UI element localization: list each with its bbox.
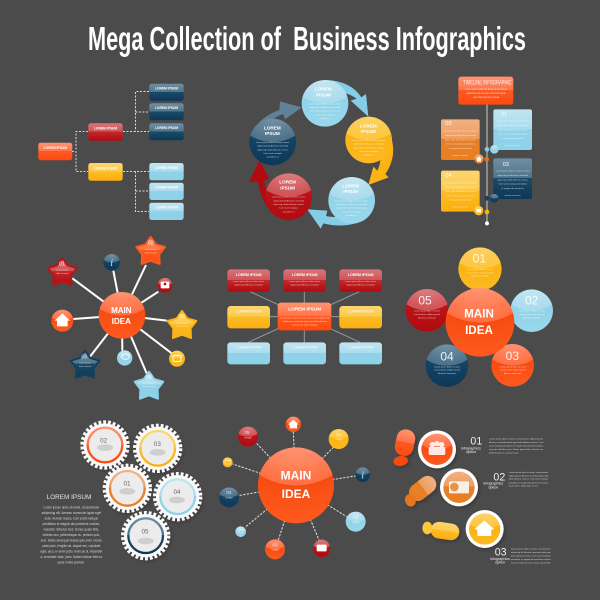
- step 3 text: penatibus et magnis dis parturient montes: [511, 558, 551, 561]
- circle 05: [406, 289, 448, 332]
- timeline card 03: Cum sociis natoque penatibus: [498, 183, 527, 186]
- step 3 text: nascetur ridiculus mus. Donec quam felis.: [511, 561, 551, 564]
- root box: LOREM IPSUM: [44, 146, 67, 150]
- red row: Lorem ipsum dolor sit amet consec: [345, 280, 376, 283]
- step 1 text: nascetur ridiculus mus. Donec quam felis, ultricies nec: [489, 448, 544, 451]
- circle: red: Lorem ipsum dolor sit amet consec: [272, 196, 306, 199]
- step 2 label: infographics: [483, 482, 503, 486]
- timeline card 04: adipiscing elit Aenean commodo: [445, 186, 477, 189]
- circle 03: 03: [506, 349, 519, 363]
- center box: LOREM IPSUM: [288, 307, 321, 312]
- circle: dark: LOREM: [264, 125, 281, 130]
- step 3 text: adipiscing elit. Aenean commodo ligula eget: [511, 551, 551, 554]
- node 02: Design: [352, 522, 360, 524]
- circle 04: [426, 344, 468, 387]
- circle: yellow: penatibus et: [363, 154, 375, 157]
- panel: star diagram: [48, 237, 196, 399]
- arrow: bottom to red: [307, 209, 368, 229]
- circle 04: consectetuer adipiscing elit: [434, 369, 460, 372]
- node 03: 03: [272, 542, 278, 547]
- gears body text: adipiscing elit. Aenean commodo ligula eget: [42, 510, 102, 515]
- circle: red: Cum sociis natoque: [279, 207, 299, 210]
- step 2 label: [483, 471, 505, 489]
- red row: Lorem ipsum dolor sit amet consec: [233, 280, 264, 283]
- icon: info: i: [110, 258, 113, 269]
- root box: [38, 143, 72, 160]
- step 1 label: infographics: [461, 446, 481, 450]
- timeline card 04: Cum sociis natoque penatibus: [446, 194, 475, 197]
- circle 01: Aenean commodo: [471, 275, 490, 278]
- panel: cycle diagram: [249, 80, 393, 229]
- yellow row: LOREM IPSUM: [236, 310, 262, 314]
- circle: top: Lorem ipsum dolor sit amet consec: [308, 102, 343, 105]
- circle 03: Lorem ipsum dolor sit amet: [500, 365, 526, 368]
- red row: LOREM IPSUM: [292, 273, 318, 277]
- gear 01: [105, 466, 150, 511]
- circle 02: [510, 289, 553, 332]
- dark boxes: LOREM IPSUM: [155, 106, 178, 110]
- arrow: yellow to bottom: [368, 129, 393, 185]
- star 01: [48, 258, 77, 285]
- light row: LOREM IPSUM: [292, 345, 318, 349]
- circle 05: 05: [418, 294, 432, 308]
- step 1 text: [489, 438, 544, 454]
- red row: LOREM IPSUM: [348, 273, 374, 277]
- star 03: dolor sit amet: [176, 325, 188, 328]
- timeline card 04: ligula eget dolor Aenean massa: [445, 190, 476, 193]
- circle: top: ligula eget dolor Aenean massa: [310, 110, 341, 113]
- node: speech: [235, 526, 246, 537]
- circle: top: adipiscing elit Aenean commodo: [310, 106, 341, 109]
- circle: bottom: Cum sociis natoque: [342, 210, 362, 213]
- gears body text: eget, arcu. In enim justo, rhoncus ut, imperdiet: [40, 548, 103, 553]
- dark boxes: LOREM IPSUM: [155, 126, 178, 130]
- circle: yellow: Lorem ipsum dolor sit amet consec: [352, 139, 386, 142]
- step 3 label: infographics: [490, 557, 510, 561]
- footprint 1: [393, 428, 417, 467]
- star 03: 03: [179, 314, 185, 320]
- star 04: [135, 372, 163, 399]
- star 03: Lorem ipsum: [176, 321, 188, 324]
- panel: gears: [40, 422, 200, 564]
- circle 03: [491, 344, 534, 387]
- yellow row: [227, 306, 382, 328]
- node: envelope: [223, 457, 233, 467]
- timeline card 02: Cum sociis natoque penatibus: [446, 143, 475, 146]
- node 01: [329, 429, 349, 449]
- timeline card 02: 02: [445, 121, 452, 127]
- icon: envelope: [169, 351, 185, 367]
- main idea circle: IDEA: [465, 324, 494, 337]
- timeline card 04: 04: [445, 173, 452, 179]
- circle: dark: penatibus et: [267, 156, 279, 159]
- step 2 text: nascetur ridiculus mus.: [509, 485, 539, 488]
- circle 04: Lorem ipsum dolor sit amet: [434, 365, 460, 368]
- node 05: Design: [244, 437, 252, 439]
- circle: bottom: Lorem ipsum dolor sit amet consec: [335, 199, 369, 202]
- node 04: Design: [225, 498, 233, 500]
- circle: yellow: ligula eget dolor Aenean massa: [354, 146, 385, 149]
- gear 02: 02: [100, 437, 108, 444]
- spokes: [72, 265, 172, 373]
- timeline card 01: [493, 109, 532, 150]
- red row: adipiscing elit Aenean commodo: [290, 283, 320, 286]
- step 1 text: Aenean commodo ligula eget dolor. Aenean massa. Cum: [489, 441, 544, 444]
- gears body text: [40, 504, 103, 564]
- circle: red: IPSUM: [280, 185, 295, 190]
- step 2 text: penatibus et magnis dis parturient montes: [509, 481, 548, 484]
- light boxes: [149, 163, 184, 220]
- gears body text: ultricies nec, pellentesque eu, pretium quis,: [43, 532, 100, 537]
- light boxes: LOREM IPSUM: [155, 186, 178, 190]
- step 3 text: Lorem ipsum dolor sit amet, consectetuer: [511, 548, 551, 551]
- circle 01: 01: [473, 252, 486, 266]
- arrow: dark to top: [251, 101, 302, 137]
- panel: five circles: [406, 247, 553, 387]
- gears body text: a, venenatis vitae, justo. Nullam dictum felis eu: [40, 554, 102, 559]
- circle: red: [265, 173, 312, 220]
- timeline card 02: adipiscing elit Aenean commodo: [445, 134, 477, 137]
- circle: top: LOREM: [315, 87, 332, 92]
- timeline card 01: et magnis dis parturient: [501, 137, 524, 140]
- light boxes: LOREM IPSUM: [155, 206, 178, 210]
- timeline card 02: Lorem ipsum dolor sit amet consec: [444, 130, 478, 133]
- star 01: 01: [59, 261, 65, 267]
- circle: yellow: LOREM: [360, 123, 377, 128]
- step 1 text: pellentesque eu, pretium quis.: [489, 451, 519, 454]
- step 3 label: option: [495, 561, 505, 565]
- main idea hub: IDEA: [112, 317, 131, 326]
- circle 05: Aenean commodo: [418, 316, 437, 319]
- star 05: 05: [81, 354, 87, 360]
- gear 05: [123, 513, 168, 558]
- circle 02: Aenean commodo: [523, 316, 541, 319]
- circle: bottom: [328, 177, 375, 224]
- timeline card 04: montes nascetur: [452, 205, 469, 208]
- timeline card 01: ligula eget dolor Aenean massa: [498, 128, 529, 131]
- step 1 text: sociis natoque penatibus et magnis dis parturient montes: [489, 444, 543, 447]
- circle: top: penatibus et: [319, 117, 331, 120]
- step 2 text: [509, 471, 549, 488]
- icon: info: [103, 254, 120, 271]
- light boxes: LOREM IPSUM: [155, 166, 178, 170]
- node 04: 04: [226, 490, 232, 495]
- circle: dark: Lorem ipsum dolor sit amet consec: [256, 141, 290, 144]
- footprint 2: [403, 472, 440, 508]
- yellow row: LOREM IPSUM: [348, 310, 374, 314]
- star 02: Lorem ipsum: [145, 248, 157, 251]
- step 2 label: option: [488, 485, 498, 489]
- dashed spokes: [233, 432, 355, 541]
- timeline header: eget dolor Aenean massa: [473, 96, 500, 99]
- gear 05: 05: [141, 529, 149, 536]
- footprint 3: [422, 521, 460, 541]
- timeline card 04: et magnis dis parturient: [449, 199, 472, 202]
- timeline card 03: ligula eget dolor Aenean massa: [498, 178, 529, 181]
- timeline header: TIMELINE INFOGRAPHIC: [463, 80, 512, 86]
- red row: LOREM IPSUM: [236, 273, 262, 277]
- light row: LOREM IPSUM: [348, 345, 374, 349]
- yellow box: LOREM IPSUM: [94, 166, 117, 170]
- circle 01: [458, 247, 502, 291]
- red box: [88, 123, 123, 141]
- gears body text: penatibus et magnis dis parturient montes,: [43, 521, 100, 526]
- circle 01: consectetuer adipiscing elit: [467, 271, 493, 274]
- circle 05: consectetuer adipiscing elit: [414, 313, 440, 316]
- circle 03: consectetuer adipiscing elit: [500, 369, 526, 372]
- step 1 text: Lorem ipsum dolor sit amet, consectetuer adipiscing elit.: [489, 438, 544, 441]
- main idea hub: MAIN: [281, 469, 311, 483]
- node: info: [355, 467, 370, 482]
- circle: top: IPSUM: [316, 92, 331, 97]
- circle 05: Lorem ipsum dolor sit amet: [414, 310, 440, 313]
- circle: bottom: LOREM: [342, 183, 359, 188]
- icon: team: [158, 278, 172, 293]
- center box: elit Aenean commodo ligula eget dolor Aenean: [282, 320, 328, 323]
- circle 04: 04: [440, 349, 454, 363]
- circle: bottom: IPSUM: [343, 189, 358, 194]
- red row: adipiscing elit Aenean commodo: [346, 283, 376, 286]
- node: info: i: [361, 470, 364, 481]
- node 05: [238, 427, 258, 447]
- main idea hub: MAIN: [111, 306, 132, 315]
- step 3 label: [490, 547, 510, 565]
- star 02: 02: [148, 241, 154, 247]
- gear 03: [135, 426, 180, 471]
- star 05: dolor sit amet: [79, 365, 91, 368]
- timeline card 03: 03: [503, 162, 509, 168]
- star 03: [168, 311, 196, 338]
- timeline card 04: [441, 171, 480, 212]
- circle: red: ligula eget dolor Aenean massa: [274, 203, 305, 206]
- circle 03: Aenean commodo: [504, 372, 522, 375]
- center box: Lorem ipsum dolor sit amet consectetuer adipiscing: [280, 317, 330, 320]
- node: team: [313, 540, 330, 557]
- dark boxes: [149, 84, 184, 140]
- timeline card 03: montes nascetur: [505, 194, 521, 197]
- timeline header: Lorem ipsum dolor sit amet consectetuer: [465, 88, 507, 91]
- main idea circle: MAIN: [464, 308, 494, 321]
- circle: top: Cum sociis natoque: [316, 113, 335, 116]
- timeline card 03: et magnis dis parturient: [501, 187, 524, 190]
- gear 04: [155, 474, 200, 519]
- red row: [227, 269, 382, 292]
- timeline card 01: Lorem ipsum dolor sit amet consec: [496, 120, 530, 123]
- star 02: dolor sit amet: [145, 251, 157, 254]
- star 04: Lorem ipsum: [143, 382, 155, 385]
- timeline card 01: Cum sociis natoque penatibus: [498, 133, 527, 136]
- step 3 label: 03: [495, 547, 507, 559]
- node 04: [219, 487, 239, 507]
- timeline card 03: Lorem ipsum dolor sit amet consec: [496, 170, 530, 173]
- panel: timeline: [441, 77, 532, 225]
- circle: yellow: IPSUM: [361, 129, 376, 134]
- step 1 circle: [418, 430, 456, 468]
- node 02: 02: [353, 515, 359, 520]
- circle: red: adipiscing elit Aenean commodo: [273, 199, 305, 202]
- timeline nodes: [474, 145, 499, 225]
- circle: yellow: Cum sociis natoque: [359, 150, 379, 153]
- timeline card 02: et magnis dis parturient: [449, 147, 472, 150]
- circle: yellow: [345, 117, 392, 163]
- star 04: dolor sit amet: [143, 385, 155, 388]
- star 05: [71, 351, 99, 378]
- star 04: 04: [146, 374, 152, 380]
- step 2 text: Lorem ipsum dolor sit amet, consectetuer: [509, 471, 549, 474]
- timeline header: [458, 77, 513, 105]
- dark boxes: LOREM IPSUM: [155, 86, 178, 90]
- red box: LOREM IPSUM: [94, 126, 117, 130]
- circle 02: consectetuer adipiscing elit: [519, 313, 545, 316]
- light row: LOREM IPSUM: [236, 345, 262, 349]
- timeline card 02: ligula eget dolor Aenean massa: [445, 138, 476, 141]
- node 01: Design: [335, 439, 343, 441]
- node 03: Design: [271, 549, 279, 551]
- step 2 text: dolor. Aenean massa. Cum sociis natoque: [509, 478, 549, 481]
- circle: bottom: adipiscing elit Aenean commodo: [336, 203, 368, 206]
- gear 03: 03: [154, 441, 161, 448]
- icon: speech: [117, 350, 132, 366]
- node 03: [265, 539, 285, 559]
- circle: dark: Cum sociis natoque: [263, 152, 283, 155]
- timeline card 04: Lorem ipsum dolor sit amet consec: [444, 181, 478, 184]
- gears body text: Lorem ipsum dolor sit amet, consectetuer: [43, 504, 100, 509]
- main idea hub: [99, 292, 145, 339]
- gears body text: dolor. Aenean massa. Cum sociis natoque: [45, 515, 99, 520]
- gears heading: LOREM IPSUM: [47, 494, 91, 501]
- timeline card 03: [493, 158, 532, 199]
- icon: home: [51, 310, 73, 332]
- circle 01: Lorem ipsum dolor sit amet: [467, 268, 493, 271]
- yellow box: [88, 163, 123, 181]
- gears body text: nascetur ridiculus mus. Donec quam felis,: [44, 526, 99, 531]
- hierarchy connectors: [72, 92, 149, 212]
- step 3 circle: [466, 510, 504, 548]
- main idea hub: [258, 447, 334, 523]
- step 1 label: 01: [470, 436, 482, 448]
- red row: Lorem ipsum dolor sit amet consec: [289, 280, 320, 283]
- panel: main idea network: [219, 417, 370, 559]
- main idea hub: IDEA: [282, 487, 311, 501]
- matrix connectors: [248, 292, 360, 342]
- gear 02: [82, 422, 128, 468]
- step 2 circle: [440, 468, 478, 506]
- timeline card 02: [441, 119, 480, 160]
- timeline card 02: montes nascetur: [452, 154, 469, 157]
- gear 04: 04: [173, 489, 181, 496]
- timeline card 01: adipiscing elit Aenean commodo: [497, 124, 529, 127]
- timeline card 03: adipiscing elit Aenean commodo: [497, 174, 529, 177]
- step 2 label: 02: [493, 471, 505, 483]
- star 01: Lorem ipsum: [57, 269, 68, 272]
- gears body text: pede mollis pretium.: [58, 559, 85, 564]
- star 01: dolor sit amet: [56, 272, 69, 275]
- step 3 text: dolor. Aenean massa. Cum sociis natoque: [511, 554, 551, 557]
- step 2 text: adipiscing elit. Aenean commodo ligula eget: [509, 474, 549, 477]
- circle: dark: IPSUM: [265, 131, 280, 136]
- node: home: [286, 417, 301, 432]
- light row: [227, 342, 382, 364]
- panel: footsteps: [393, 428, 551, 565]
- gears body text: sem. Nulla consequat massa quis enim. Donec: [41, 537, 102, 542]
- arrow: top to yellow: [327, 80, 368, 117]
- star 02: [136, 237, 165, 264]
- circle: red: penatibus et: [283, 210, 295, 213]
- circle: dark: ligula eget dolor Aenean massa: [258, 148, 289, 151]
- circle: top: [302, 80, 348, 127]
- timeline card 01: montes nascetur: [505, 144, 521, 147]
- timeline card 01: 01: [501, 112, 507, 118]
- circle 04: Aenean commodo: [438, 372, 457, 375]
- star 05: Lorem ipsum: [79, 362, 91, 365]
- circle 02: Lorem ipsum dolor sit amet: [519, 310, 545, 313]
- node 05: 05: [244, 430, 250, 435]
- gears body text: pede justo, fringilla vel, aliquet nec, vulputate: [42, 543, 101, 548]
- timeline header: adipiscing elit Aenean commodo ligula: [466, 92, 506, 95]
- node 02: [346, 512, 366, 532]
- circle: bottom: ligula eget dolor Aenean massa: [337, 207, 368, 210]
- gear 01: 01: [123, 481, 131, 488]
- circle 02: 02: [525, 294, 539, 308]
- step 1 label: option: [466, 450, 476, 454]
- center box: [278, 303, 331, 330]
- step 3 text: [511, 548, 551, 564]
- circle: yellow: adipiscing elit Aenean commodo: [353, 143, 385, 146]
- circle: dark: [249, 119, 296, 165]
- node 01: 01: [336, 432, 342, 437]
- red row: adipiscing elit Aenean commodo: [234, 283, 264, 286]
- center box: massa Cum sociis natoque: [292, 323, 318, 326]
- main idea circle: [446, 288, 514, 357]
- panel: hierarchy chart: [38, 84, 184, 220]
- panel: box matrix: [227, 269, 382, 364]
- circle: red: LOREM: [279, 179, 296, 184]
- timeline axis: [486, 103, 488, 223]
- arrow: red to dark: [249, 161, 287, 219]
- circle: dark: adipiscing elit Aenean commodo: [257, 145, 289, 148]
- step 1 label: [461, 436, 482, 454]
- circle: bottom: penatibus et: [346, 214, 358, 217]
